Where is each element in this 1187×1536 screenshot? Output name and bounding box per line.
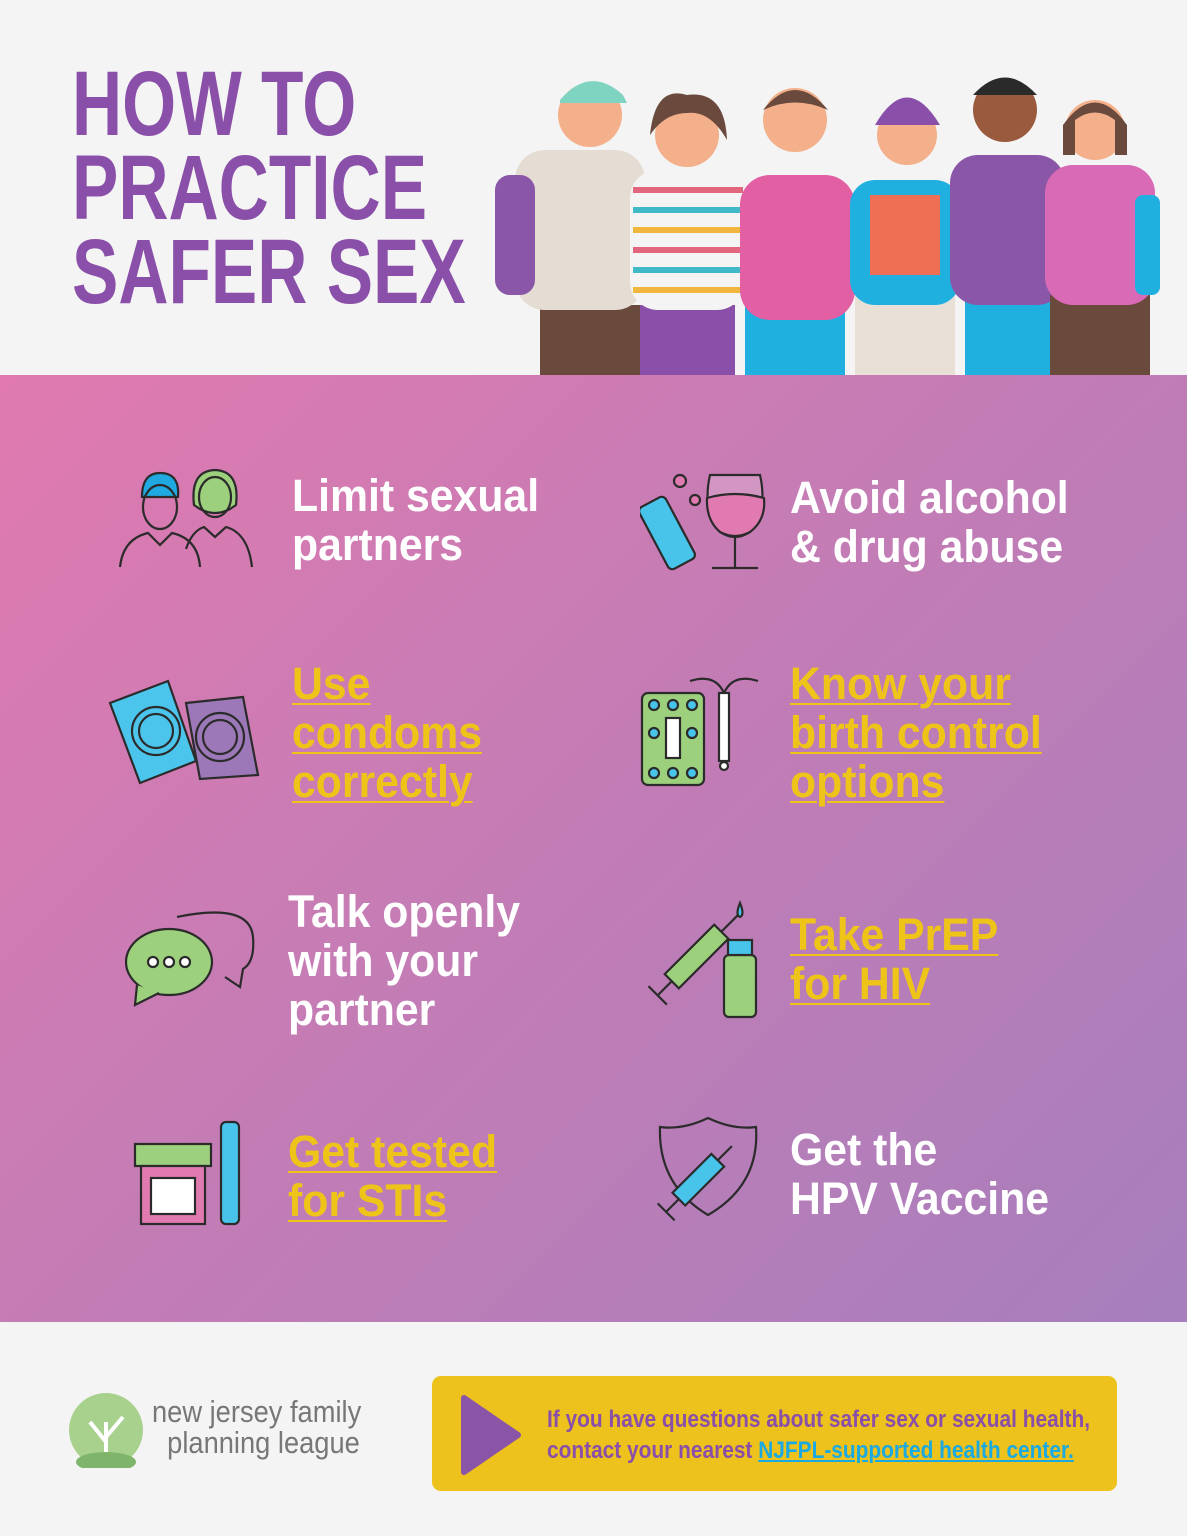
text: limit partners: partners <box>292 519 463 570</box>
icon: test kit <box>134 1120 240 1226</box>
text: get tested <box>288 1126 498 1226</box>
logo: NJFPL <box>69 1393 362 1468</box>
icon: condoms <box>108 680 260 784</box>
title: HOW TO <box>72 53 356 155</box>
text: HPV: HPV Vaccine <box>790 1173 1049 1224</box>
text: limit partners <box>292 470 539 570</box>
icon: play arrow <box>461 1395 521 1475</box>
text: avoid alcohol <box>790 472 1069 572</box>
text: PrEP: Take PrEP <box>790 909 998 960</box>
text: avoid alcohol: & drug abuse <box>790 521 1063 572</box>
icon: syringe and vial <box>648 900 758 1018</box>
text: avoid alcohol: Avoid alcohol <box>790 472 1069 523</box>
title <box>72 53 466 323</box>
text: condoms: correctly <box>292 756 473 807</box>
logo: NJFPL: planning league <box>167 1425 360 1460</box>
text: limit partners: Limit sexual <box>292 470 539 521</box>
text: birth control: birth control <box>790 707 1042 758</box>
text: condoms: Use <box>292 658 370 709</box>
title: PRACTICE <box>72 137 427 239</box>
text: condoms <box>292 658 482 807</box>
icon: two people <box>118 468 254 568</box>
text: get tested: Get tested <box>288 1126 497 1177</box>
icon: pills and wine <box>640 474 766 570</box>
text: talk openly: partner <box>288 984 435 1035</box>
text: HPV: Get the <box>790 1124 937 1175</box>
callout text: If you have questions about safer sex or sexual health, <box>547 1406 1090 1433</box>
text: get tested: for STIs <box>288 1175 447 1226</box>
text: talk openly <box>288 886 520 1035</box>
callout banner <box>432 1376 1117 1491</box>
logo: NJFPL: new jersey family <box>152 1394 361 1429</box>
text: birth control: Know your <box>790 658 1011 709</box>
panel: tips <box>0 375 1187 1322</box>
icon: birth control <box>640 678 758 786</box>
text: talk openly: Talk openly <box>288 886 520 937</box>
title: SAFER SEX <box>72 221 466 323</box>
text: talk openly: with your <box>288 935 478 986</box>
illustration: group of students <box>495 78 1160 375</box>
icon: shield and syringe <box>656 1116 758 1222</box>
text: PrEP: for HIV <box>790 958 930 1009</box>
text: HPV <box>790 1124 1049 1224</box>
icon: speech bubbles <box>125 911 254 1007</box>
text: PrEP <box>790 909 998 1009</box>
callout text <box>547 1406 1090 1464</box>
callout text: contact your nearest NJFPL-supported health center. <box>547 1437 1074 1464</box>
text: birth control <box>790 658 1042 807</box>
text: condoms: condoms <box>292 707 482 758</box>
text: birth control: options <box>790 756 944 807</box>
